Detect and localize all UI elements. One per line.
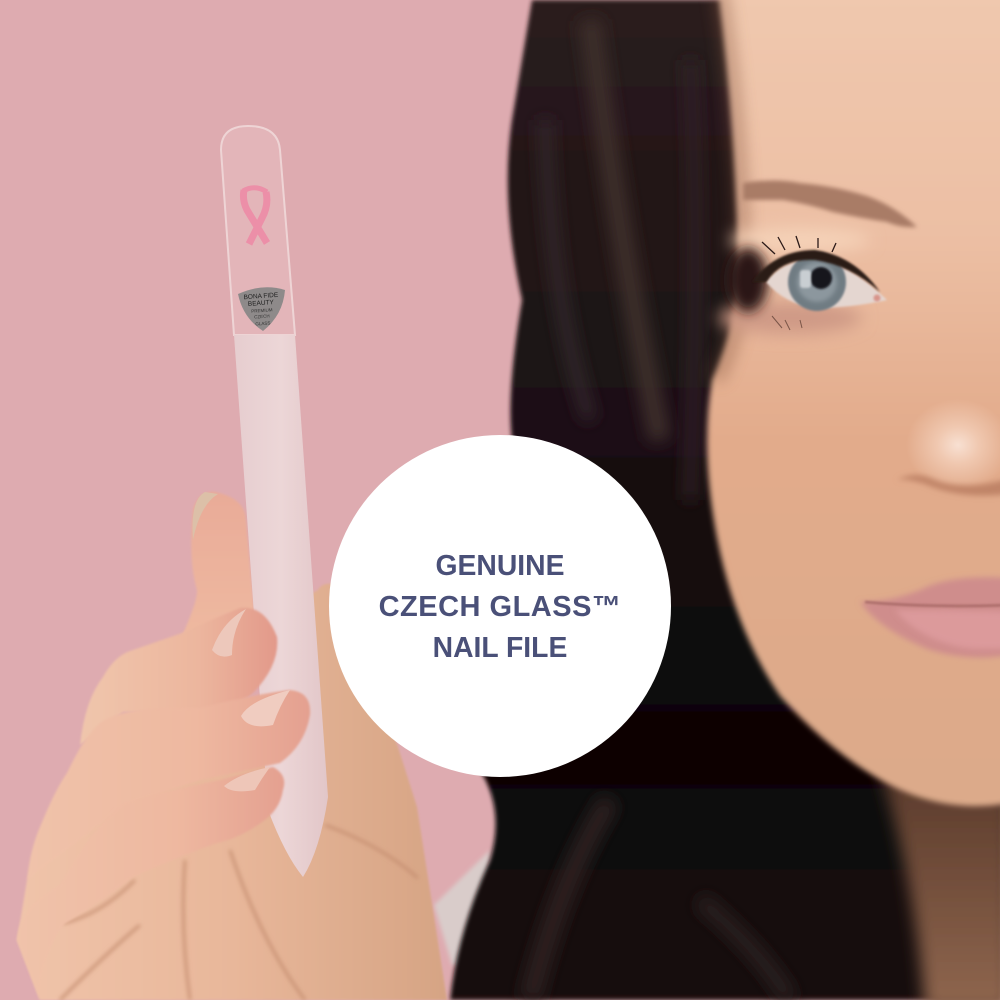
eye socket shadow [718,302,862,334]
headline line 2: CZECH GLASS™ [379,591,621,623]
index finger [80,608,277,745]
lips [860,577,1000,658]
fingernail: middle [241,690,290,726]
face [707,0,1000,806]
nose [897,399,1000,496]
sweater hint [434,850,490,965]
headline line 3: NAIL FILE [433,631,567,663]
silver badge: BEAUTY [248,299,275,308]
circle badge [329,435,671,777]
ring finger [17,767,284,1000]
fingernail: index [212,609,246,657]
silver badge: CZECH [254,313,270,320]
frosted bottom of file [234,335,328,877]
hair [450,0,1000,1000]
silver badge: BONA FIDE [243,292,279,301]
silver badge: PREMIUM [251,307,273,314]
silver badge [238,287,285,331]
neck [880,770,1000,1000]
fingernail: finger behind [192,492,218,540]
finger behind file [182,492,254,636]
hand: fingers in front of file [17,492,310,1000]
pink ribbon [243,188,267,244]
clear top of file [221,126,295,335]
middle finger [27,690,310,880]
hand: palm creases [60,825,418,1000]
eye [728,236,887,330]
hand: thumb and palm behind file [17,584,447,1000]
eyebrow [743,180,917,227]
silver badge: GLASS [255,320,271,327]
nail file [221,126,328,877]
hairline shadow [716,0,743,380]
headline line 1: GENUINE [436,549,564,581]
fingernail: ring [224,767,270,791]
